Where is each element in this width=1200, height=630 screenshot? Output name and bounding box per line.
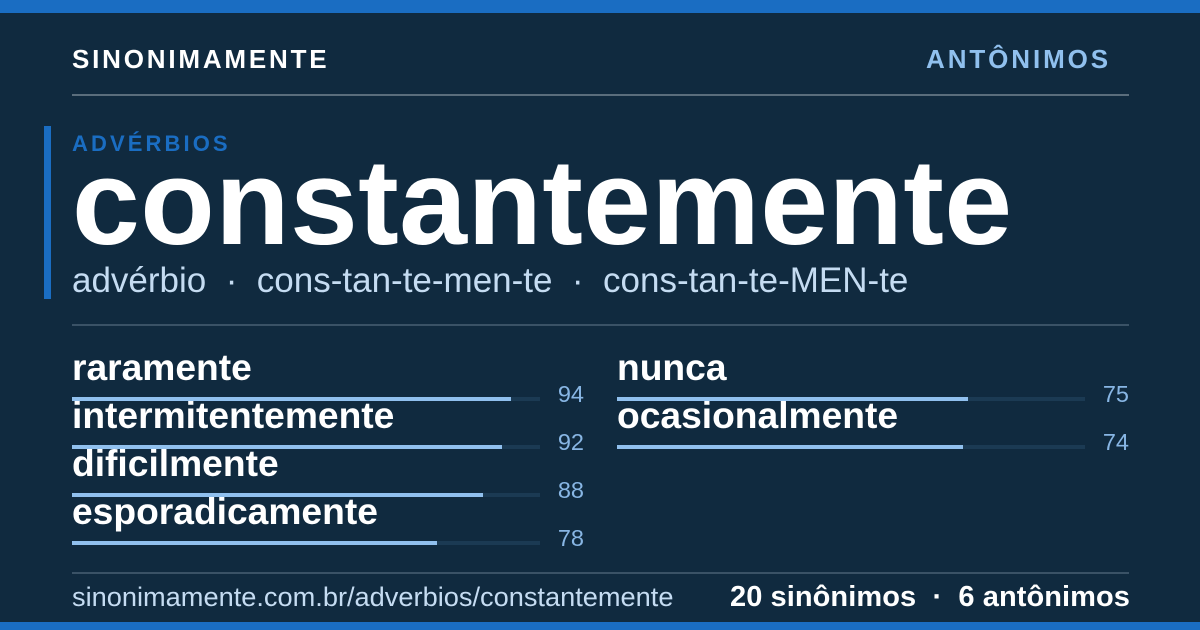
row: nunca 75	[617, 346, 1129, 407]
row: nunca 75: 75	[1103, 381, 1129, 407]
section label: antônimos: ANTÔNIMOS	[926, 44, 1111, 74]
row: ocasionalmente 74	[617, 394, 1129, 455]
row: esporadicamente 78	[72, 490, 584, 551]
row: dificilmente 88: 88	[558, 477, 584, 503]
row: nunca 75: nunca	[617, 346, 727, 388]
header divider	[72, 94, 1129, 96]
section divider	[72, 324, 1129, 326]
row: intermitentemente 92: 92	[558, 429, 584, 455]
row: intermitentemente 92	[72, 394, 584, 455]
headword accent bar	[44, 126, 51, 299]
category label: ADVÉRBIOS	[72, 131, 231, 156]
row: esporadicamente 78: 78	[558, 525, 584, 551]
left column: similar words	[72, 346, 584, 551]
row: dificilmente 88: dificilmente	[72, 442, 279, 484]
right column: similar words	[617, 346, 1129, 455]
row: ocasionalmente 74: ocasionalmente	[617, 394, 898, 436]
headword: constantemente	[72, 134, 1012, 270]
footer counts: 20 sinônimos · 6 antônimos	[730, 581, 1130, 613]
word details: class and syllables: advérbio · cons-tan-te-men-te · cons-tan-te-MEN-te	[72, 261, 908, 300]
row: ocasionalmente 74: 74	[1103, 429, 1129, 455]
brand name: SINONIMAMENTE	[72, 44, 329, 74]
row: raramente 94: raramente	[72, 346, 252, 388]
row: esporadicamente 78: esporadicamente	[72, 490, 378, 532]
top accent bar	[0, 0, 1200, 13]
row: dificilmente 88	[72, 442, 584, 503]
footer url: sinonimamente.com.br/adverbios/constantemente	[72, 581, 673, 612]
bottom accent bar	[0, 622, 1200, 630]
row: raramente 94: 94	[558, 381, 584, 407]
footer divider	[72, 572, 1129, 574]
row: raramente 94	[72, 346, 584, 407]
row: intermitentemente 92: intermitentemente	[72, 394, 394, 436]
